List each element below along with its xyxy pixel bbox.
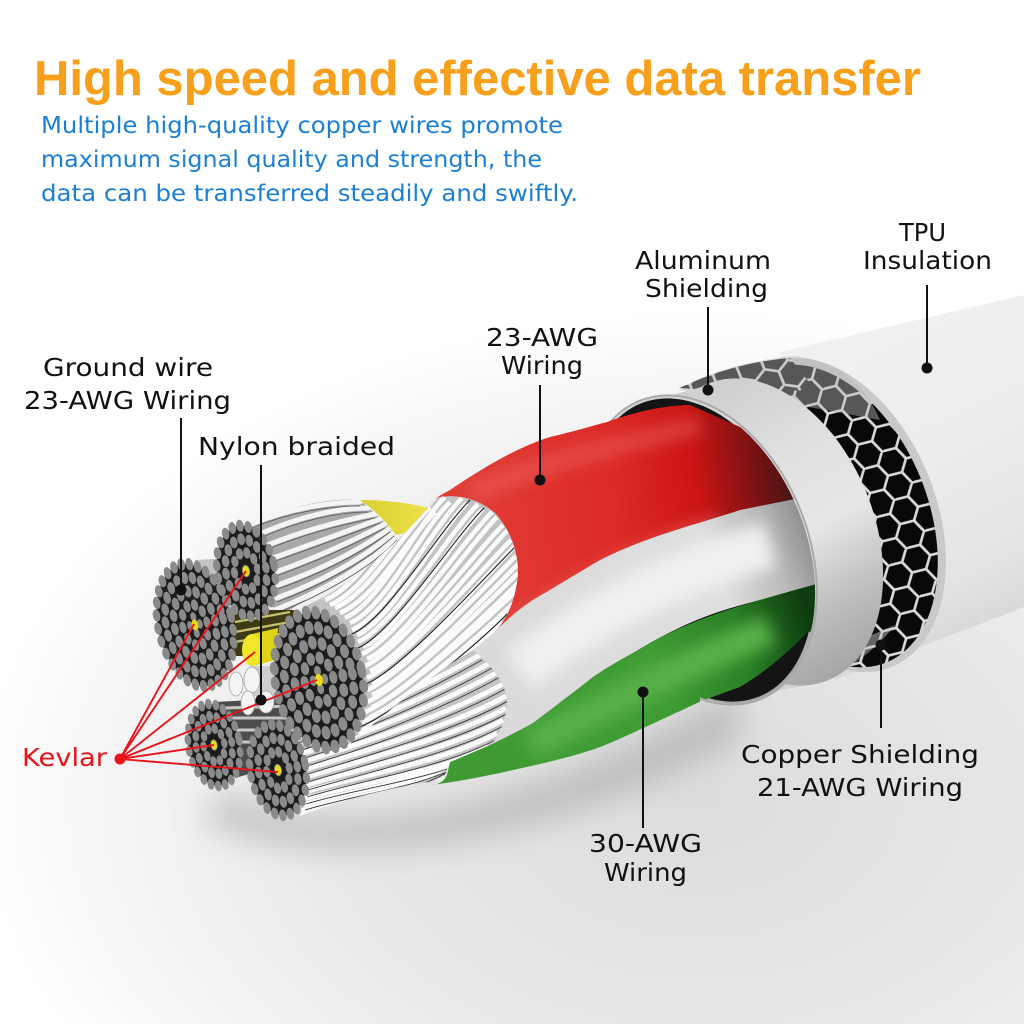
red wire — [427, 405, 794, 629]
yellow core — [242, 628, 278, 666]
label: 23-AWG wiring — [486, 323, 598, 486]
white wire — [474, 499, 815, 744]
strand end: lower right — [243, 720, 313, 820]
large strand bundle — [303, 496, 518, 746]
TPU insulation jacket — [780, 295, 1024, 680]
kevlar callout — [22, 571, 317, 772]
label: 23-AWG wiring: Wiring — [501, 351, 583, 380]
upper strand bundle — [240, 500, 400, 618]
cable illustration — [145, 295, 1024, 821]
strand end: upper — [210, 521, 282, 621]
copper shielding mesh — [674, 332, 980, 700]
floor shadow — [200, 690, 740, 850]
yellow inner strands — [232, 610, 294, 656]
label: copper shielding — [741, 640, 979, 802]
nylon braided fibers — [229, 666, 284, 715]
label: ground wire — [24, 353, 231, 596]
label: 30-AWG wiring — [589, 686, 702, 887]
yellow wire sheath — [360, 500, 428, 535]
label: ground wire: 23-AWG Wiring — [24, 386, 231, 415]
label: copper shielding: Copper Shielding — [741, 740, 979, 769]
kevlar label: Kevlar — [22, 743, 108, 772]
jacket rim — [670, 323, 990, 707]
label: aluminum shielding — [635, 246, 771, 396]
lower right strand bundle — [298, 650, 507, 816]
label: 30-AWG wiring: Wiring — [604, 858, 687, 887]
label: aluminum shielding: Aluminum — [635, 246, 771, 275]
kevlar leader lines — [120, 571, 317, 772]
label: TPU insulation: Insulation — [863, 246, 992, 275]
sleeve opening — [544, 365, 856, 735]
label: ground wire: Ground wire — [43, 353, 213, 382]
floor tone — [0, 300, 1024, 1024]
description text: data can be transferred steadily and swiftly. — [41, 181, 578, 207]
label: TPU insulation: TPU — [898, 218, 946, 247]
strand end: lower left — [182, 700, 246, 790]
label: copper shielding: 21-AWG Wiring — [757, 773, 963, 802]
label: nylon braided — [198, 432, 395, 706]
description text: maximum signal quality and strength, the — [41, 147, 542, 173]
lower left strands — [214, 698, 305, 778]
aluminum shielding sleeve — [540, 344, 926, 740]
label: 30-AWG wiring: 30-AWG — [589, 829, 702, 858]
ground wire strands — [195, 558, 240, 600]
strand end: large — [263, 605, 375, 755]
green wire — [430, 584, 816, 785]
label: TPU insulation — [863, 218, 992, 374]
description text — [41, 113, 578, 207]
label: nylon braided: Nylon braided — [198, 432, 395, 461]
title: High speed and effective data transfer — [34, 52, 921, 106]
description text: Multiple high-quality copper wires promote — [41, 113, 563, 139]
label: 23-AWG wiring: 23-AWG — [486, 323, 598, 352]
strand end: ground wire — [145, 556, 245, 694]
kevlar dot — [114, 754, 126, 764]
label: aluminum shielding: Shielding — [645, 274, 768, 303]
